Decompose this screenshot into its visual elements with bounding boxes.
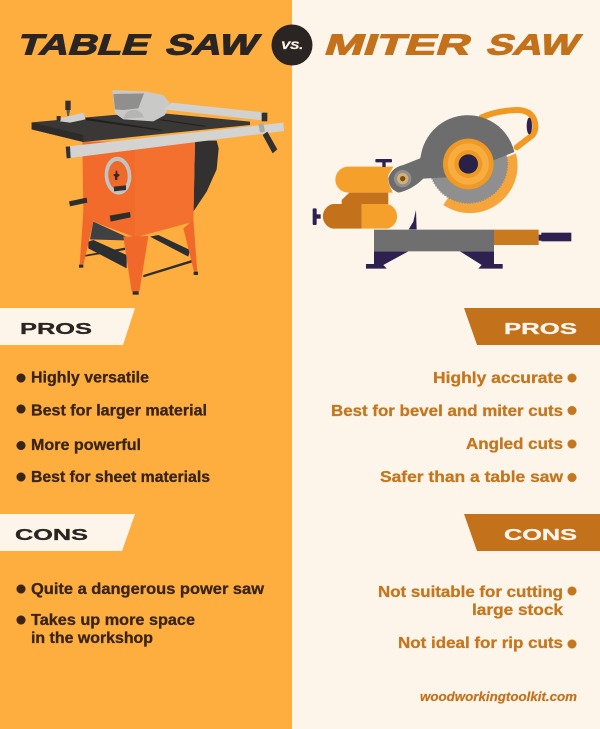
title: table saw	[14, 29, 264, 61]
banner: miter saw cons	[464, 514, 600, 551]
fence	[163, 103, 267, 121]
item: Not suitable for cutting	[378, 584, 563, 601]
title: table saw: SAW	[162, 29, 264, 61]
title: miter saw: SAW	[483, 29, 585, 61]
title: table saw: TABLE	[14, 29, 155, 61]
item: More powerful	[31, 437, 141, 454]
miter gauge	[57, 101, 86, 123]
badge: vs.	[272, 24, 312, 66]
banner: miter saw pros	[464, 308, 600, 345]
illustration: miter saw	[313, 110, 571, 269]
item: Quite a dangerous power saw	[31, 581, 265, 598]
lower motor housing	[313, 193, 397, 229]
item: in the workshop	[31, 630, 153, 647]
pivot joint	[394, 170, 411, 187]
item: Best for bevel and miter cuts	[331, 403, 563, 420]
badge: vs.: VS.	[281, 40, 303, 52]
panel: miter saw background	[292, 0, 600, 729]
feet	[79, 265, 198, 295]
item	[17, 612, 195, 647]
saw body	[82, 142, 195, 237]
item: Highly accurate	[433, 370, 563, 387]
panel: table saw background	[0, 0, 292, 729]
motor cover	[193, 141, 219, 212]
handles	[69, 198, 131, 222]
item: Takes up more space	[31, 612, 195, 629]
item: large stock	[472, 602, 563, 619]
item: Angled cuts	[466, 436, 563, 453]
base	[366, 230, 503, 269]
item: Not ideal for rip cuts	[398, 635, 563, 652]
list: table saw pros	[17, 370, 210, 486]
extension arm	[494, 230, 571, 245]
blade guard	[112, 90, 170, 121]
serrated blade	[429, 125, 507, 203]
legs	[80, 212, 197, 292]
upper blade guard	[388, 115, 514, 193]
banner: table saw pros	[0, 308, 135, 345]
title: miter saw: MITER	[321, 29, 476, 61]
banner: table saw cons	[0, 514, 135, 551]
item: Highly versatile	[31, 370, 149, 386]
footer: website: woodworkingtoolkit.com	[420, 689, 577, 704]
banner: table saw cons: CONS	[15, 527, 89, 544]
blade wheel	[103, 156, 133, 196]
title: miter saw	[321, 29, 585, 61]
list: miter saw cons	[378, 584, 576, 652]
banner: table saw pros: PROS	[20, 321, 93, 338]
blade hub	[443, 139, 494, 189]
item: Best for sheet materials	[31, 469, 210, 486]
list: miter saw pros	[331, 370, 576, 486]
front rail	[66, 123, 284, 158]
item: Best for larger material	[31, 402, 207, 420]
fence fin	[409, 210, 417, 229]
rear leg frame and braces	[85, 222, 192, 277]
banner: miter saw cons: CONS	[504, 527, 578, 544]
banner: miter saw pros: PROS	[504, 321, 578, 338]
upper motor housing	[335, 159, 393, 193]
table top	[32, 113, 250, 142]
lower blade cover	[443, 153, 518, 213]
list: table saw cons	[17, 581, 265, 647]
rail lock handle	[258, 123, 277, 153]
item	[378, 584, 576, 619]
item: Safer than a table saw	[380, 469, 564, 486]
saw handle	[482, 110, 535, 147]
illustration: table saw	[32, 90, 284, 295]
